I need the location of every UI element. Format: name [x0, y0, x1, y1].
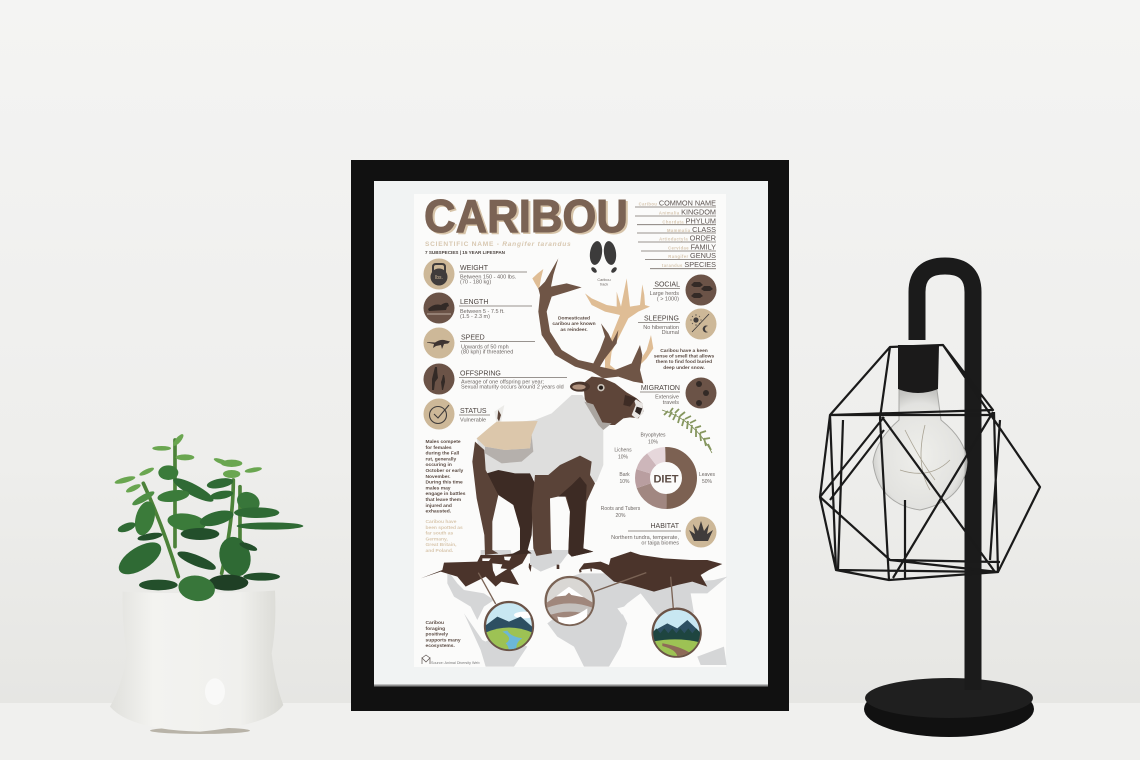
stat: sleeping: SLEEPING — [644, 316, 679, 322]
stat: habitat — [611, 516, 716, 548]
near antler — [538, 258, 643, 383]
picture frame — [351, 160, 789, 711]
saddle — [477, 421, 538, 450]
subspecies and lifespan: 7 SUBSPECIES | 15 YEAR LIFESPAN — [425, 250, 506, 255]
stat: speed — [424, 328, 535, 358]
note: rut behaviour: Males compete — [426, 439, 461, 445]
note: rut behaviour: exhausted. — [426, 509, 452, 515]
gray continents — [447, 550, 727, 667]
stat: offspring: OFFSPRING — [460, 370, 501, 378]
note: ecosystems: positively — [426, 632, 448, 638]
note: range sightings: far south as — [426, 531, 454, 537]
title: CARIBOU — [426, 192, 630, 244]
chart centre label: DIET — [653, 474, 679, 486]
taxonomy list: Cervidae FAMILY — [668, 242, 716, 252]
habitat badges — [478, 573, 701, 658]
body — [477, 395, 603, 483]
taxonomy list: Mammalia CLASS — [667, 225, 716, 234]
diet donut chart — [601, 432, 716, 519]
note: rut behaviour: occuring in — [426, 462, 452, 468]
pot — [110, 591, 283, 732]
lamp base — [864, 678, 1034, 737]
note: rut behaviour: during the Fall — [426, 451, 460, 457]
note: domesticated: as reindeer. — [560, 327, 588, 333]
lamp — [820, 266, 1040, 737]
taxonomy list: Rangifer GENUS — [668, 251, 716, 260]
stat: length: (1.5 - 2.3 m) — [460, 314, 490, 320]
stat: social: Large herds — [650, 291, 679, 297]
note: range sightings: Germany, — [426, 536, 448, 542]
chart labels: Lichens — [614, 448, 632, 454]
chart labels: 20% — [615, 513, 626, 519]
note: range sightings: Great Britain, — [426, 542, 457, 548]
overhanging leaf — [177, 573, 217, 603]
stat: social — [650, 274, 716, 306]
saddle shadow — [485, 435, 533, 463]
note: sense of smell: them to find food buried — [656, 359, 712, 365]
pot shadow — [150, 727, 250, 734]
chart labels: Bryophytes — [640, 432, 666, 438]
Iceland and islands — [529, 563, 592, 573]
bulb socket — [898, 345, 939, 393]
eye — [597, 384, 605, 391]
stat: migration: travels — [663, 400, 679, 406]
badge: river valley — [484, 602, 534, 653]
stat: social: ( > 1000) — [657, 296, 679, 302]
note: rut behaviour: During this time — [426, 480, 463, 486]
chart labels: 10% — [619, 479, 630, 485]
stat: migration — [640, 378, 716, 408]
note: domesticated: caribou are known — [552, 321, 596, 327]
stat: weight: (70 - 180 kg) — [460, 280, 491, 286]
stat: offspring: Sexual maturity occurs around 2 years old — [461, 385, 564, 391]
stat: habitat: Northern tundra, temperate, — [611, 535, 679, 541]
ground shadow — [530, 550, 562, 565]
icon: paw prints — [696, 381, 709, 406]
stat: sleeping: No hibernation — [643, 325, 679, 331]
note: range sightings: Caribou have — [426, 519, 457, 525]
stat: offspring — [424, 364, 567, 394]
far front leg — [558, 477, 593, 557]
caribou illustration — [472, 258, 653, 565]
icon: sun and moon — [690, 314, 709, 332]
note: sense of smell: sense of smell that allows — [654, 354, 714, 360]
scientific name: SCIENTIFIC NAME - Rangifer tarandus — [425, 241, 571, 248]
chart labels: 50% — [702, 479, 713, 485]
connector lines — [478, 573, 673, 608]
pot highlight — [205, 678, 225, 705]
icon: animal silhouette — [428, 303, 449, 311]
icon: check mark — [430, 405, 449, 424]
near hind leg — [472, 442, 498, 555]
note: ecosystems: foraging — [426, 626, 445, 632]
stat: offspring: Average of one offspring per year; — [461, 380, 544, 386]
wire cage — [820, 345, 1040, 580]
track caption: Caribou — [597, 278, 611, 282]
note: ecosystems: supports many — [426, 637, 461, 643]
note: range sightings: and Poland. — [426, 548, 454, 554]
chart labels: Roots and Tubers — [601, 506, 640, 512]
stat: weight — [424, 258, 527, 290]
ear — [570, 382, 590, 392]
near front leg — [532, 456, 595, 557]
head — [583, 377, 643, 425]
stat: sleeping: Diurnal — [662, 330, 679, 336]
fern frond — [662, 408, 712, 453]
chart labels: Bark — [619, 472, 630, 478]
icon: tundra plant — [689, 521, 713, 541]
shelf — [0, 703, 1140, 760]
taxonomy list: Animalia KINGDOM — [659, 208, 716, 216]
far antler — [532, 269, 653, 377]
stat: habitat: HABITAT — [650, 523, 680, 530]
source credit: Source: Animal Diversity Web — [431, 661, 480, 665]
stat: status: Vulnerable — [460, 418, 486, 424]
note: rut behaviour: engage in battles — [426, 491, 466, 497]
note: rut behaviour: that leave them — [426, 497, 462, 503]
source credit — [422, 655, 480, 665]
taxonomy list — [635, 198, 716, 269]
leaves — [114, 465, 303, 591]
lamp post and hook — [917, 266, 973, 690]
stat: weight: WEIGHT — [460, 265, 489, 272]
stat: length: LENGTH — [460, 299, 488, 306]
North America range — [421, 552, 529, 587]
stat: speed: SPEED — [461, 334, 485, 342]
chart labels: Leaves — [699, 472, 715, 478]
far hind leg — [487, 470, 535, 555]
muzzle — [632, 398, 643, 419]
note: rut behaviour: injured and — [426, 503, 452, 509]
stat: speed: Upwards of 50 mph — [461, 344, 509, 350]
antlers and head — [532, 258, 653, 425]
taxonomy list: Chordata PHYLUM — [662, 216, 716, 225]
stat: migration: Extensive — [655, 394, 679, 400]
note: rut behaviour: males may — [426, 485, 451, 491]
badge: forest — [652, 609, 701, 658]
note: ecosystems: ecosystems. — [426, 643, 456, 649]
note: rut behaviour: November. — [426, 474, 451, 480]
stat: status — [424, 398, 490, 430]
stat: length — [424, 292, 532, 324]
neck shadow — [584, 402, 612, 430]
chart labels: 10% — [618, 454, 629, 460]
stat: habitat: or taiga biomes — [641, 540, 679, 546]
stems — [143, 440, 240, 577]
chart labels — [601, 432, 716, 519]
badge: snowy mountain — [546, 577, 594, 628]
note: sense of smell: Caribou have a keen — [660, 348, 708, 354]
taxonomy list: Caribou COMMON NAME — [639, 198, 716, 208]
stat: weight: Between 150 - 400 lbs. — [460, 274, 516, 280]
title: CARIBOU — [424, 190, 628, 242]
stat: status: STATUS — [460, 408, 487, 415]
stat: migration: MIGRATION — [641, 385, 680, 392]
icon: caribou track — [588, 240, 618, 274]
note: rut behaviour: for females — [426, 445, 452, 451]
bulb — [873, 390, 967, 510]
icon: kettlebell: lbs. — [435, 275, 443, 281]
plant in white pot — [110, 433, 303, 734]
poster sheet — [414, 194, 726, 667]
track caption: track — [600, 283, 608, 287]
stat: length: Between 5 - 7.5 ft. — [460, 309, 505, 315]
taxonomy list: tarandus SPECIES — [662, 260, 716, 269]
note: rut behaviour: rut, generally — [426, 456, 456, 462]
stat: social: SOCIAL — [654, 282, 680, 288]
icon: herd — [691, 282, 713, 298]
chart labels: 10% — [648, 440, 659, 446]
world map — [421, 550, 727, 667]
tail — [494, 405, 504, 424]
taxonomy list: Artiodactyla ORDER — [659, 234, 716, 242]
note: rut behaviour: October or early — [426, 468, 464, 474]
icon: adult and calf — [432, 367, 445, 390]
note: range sightings: been spotted as — [426, 525, 463, 531]
stat: speed: (80 kph) if threatened — [461, 350, 513, 356]
Eurasia range — [579, 552, 722, 592]
note: ecosystems: Caribou — [426, 620, 444, 626]
stat: sleeping — [638, 308, 716, 340]
note: sense of smell: deep under snow. — [663, 365, 705, 371]
icon: running animal — [427, 340, 450, 349]
note: domesticated: Domesticated — [558, 316, 590, 322]
poster — [414, 190, 727, 667]
